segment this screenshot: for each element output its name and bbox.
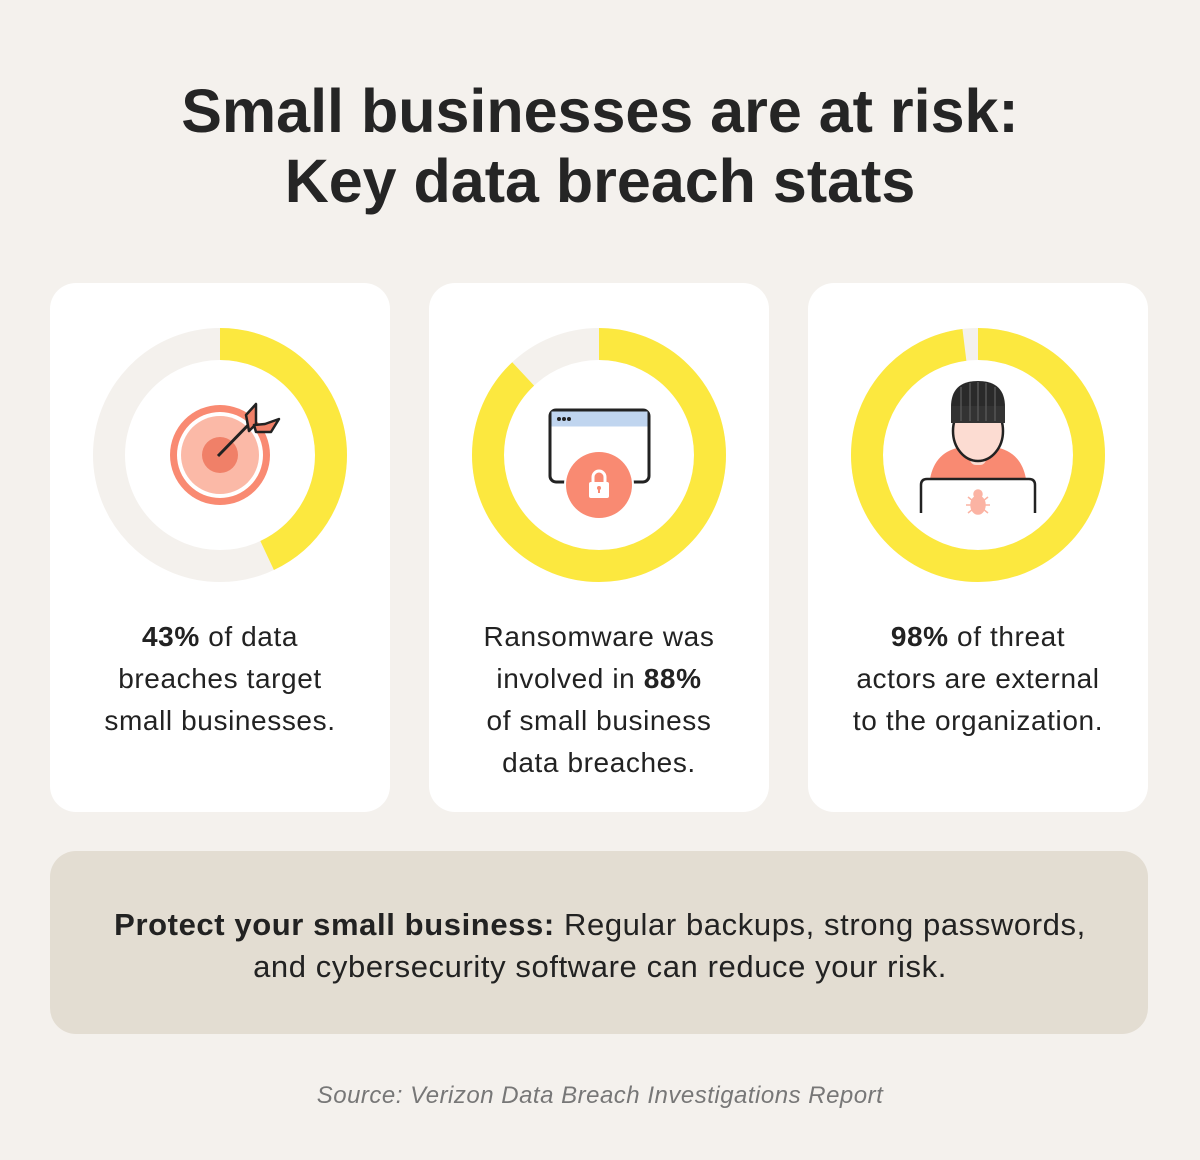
panel: ransomware 88% xyxy=(429,283,769,812)
callout text xyxy=(114,907,1086,984)
callout text: and cybersecurity software can reduce your risk. xyxy=(253,949,947,984)
stat text: 98% of threat xyxy=(891,621,1065,652)
stat text: breaches target xyxy=(118,663,322,694)
stat text xyxy=(104,621,336,736)
donut chart 43% with target icon xyxy=(93,328,347,582)
stat text: to the organization. xyxy=(853,705,1103,736)
stat text: small businesses. xyxy=(104,705,336,736)
stat text: involved in 88% xyxy=(496,663,702,694)
panel: 43% small businesses xyxy=(50,283,390,812)
stat text: Ransomware was xyxy=(484,621,714,652)
source: Source: Verizon Data Breach Investigations Report xyxy=(317,1082,883,1109)
callout text: Protect your small business: Regular backups, strong passwords, xyxy=(114,907,1086,942)
stat text: data breaches. xyxy=(502,747,696,778)
title xyxy=(181,77,1019,215)
stat text xyxy=(853,621,1103,736)
stat text xyxy=(484,621,714,778)
panel: 98% external actors xyxy=(808,283,1148,812)
title: Key data breach stats xyxy=(285,147,915,215)
title: Small businesses are at risk: xyxy=(181,77,1019,145)
donut chart 98% with hacker icon xyxy=(851,328,1105,582)
callout box: protect your business xyxy=(50,851,1148,1034)
stat text: actors are external xyxy=(856,663,1100,694)
stat text: 43% of data xyxy=(142,621,298,652)
stat text: of small business xyxy=(487,705,711,736)
donut chart 88% with locked browser icon xyxy=(472,328,726,582)
